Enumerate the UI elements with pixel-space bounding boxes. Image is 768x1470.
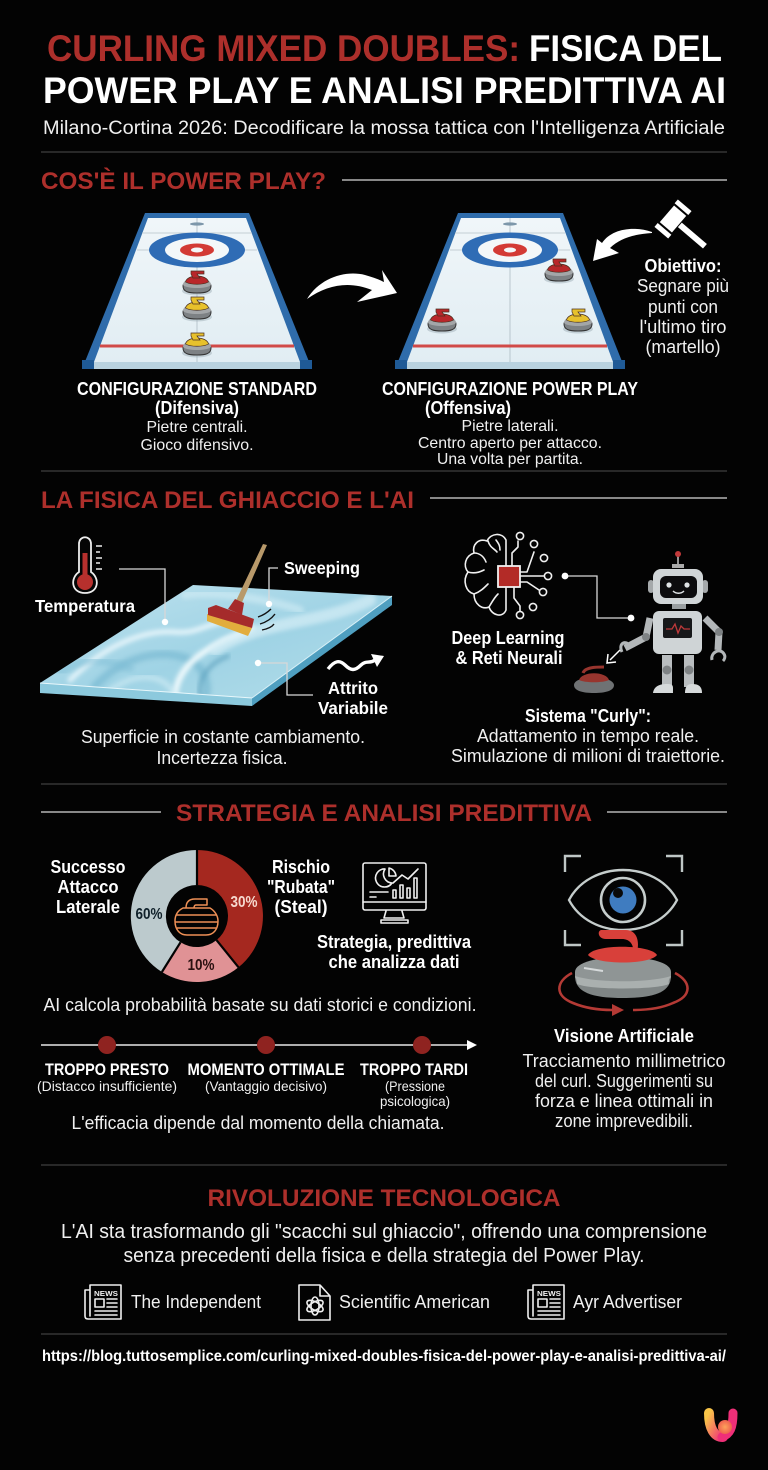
text: standard configuration xyxy=(77,379,317,454)
source: the independent: NEWS xyxy=(94,1289,118,1298)
label: deep learning: & Reti Neurali xyxy=(456,648,562,668)
label: rischio rubata: "Rubata" xyxy=(267,877,335,897)
text: visione artificiale: Tracciamento millimetrico xyxy=(522,1051,726,1071)
text: standard configuration: Gioco difensivo. xyxy=(140,437,254,454)
text: sistema curly xyxy=(451,706,725,766)
callout: obiettivo: Obiettivo: xyxy=(644,256,722,276)
panel: strategia e analisi predittiva xyxy=(37,800,727,1133)
text: AI probabilities: AI calcola probabilità basate su dati storici e condizioni. xyxy=(44,995,476,1015)
label: deep learning: Deep Learning xyxy=(452,628,564,648)
label: deep learning xyxy=(452,628,564,668)
text: sistema curly: Sistema "Curly": xyxy=(525,706,651,726)
source: ayr advertiser: Ayr Advertiser xyxy=(573,1291,682,1312)
text: conclusion xyxy=(61,1220,707,1267)
callout: obiettivo: l'ultimo tiro xyxy=(640,317,726,337)
text: power play configuration: Pietre laterali. xyxy=(462,418,558,435)
text: surface description: Superficie in costante cambiamento. xyxy=(81,727,365,747)
text: visione artificiale: zone imprevedibili. xyxy=(555,1111,693,1131)
label: successo attacco laterale: Successo xyxy=(50,857,126,877)
label: troppo tardi: TROPPO TARDI xyxy=(360,1061,468,1079)
title: POWER PLAY E ANALISI PREDITTIVA AI xyxy=(43,70,726,111)
icon: curling stone outline xyxy=(175,899,218,935)
icon: gavel xyxy=(654,199,717,260)
panel: cos'è il power play xyxy=(41,167,729,468)
label: momento ottimale xyxy=(188,1061,344,1094)
label: temperatura: Temperatura xyxy=(35,596,135,616)
text: conclusion: senza precedenti della fisica e della strategia del Power Play. xyxy=(124,1244,644,1267)
callout: obiettivo: Segnare più xyxy=(637,276,729,296)
text: power play configuration: (Offensiva) xyxy=(425,398,511,418)
text: visione artificiale: del curl. Suggerimenti su xyxy=(535,1071,713,1091)
label: troppo presto xyxy=(37,1061,177,1094)
text: surface description: Incertezza fisica. xyxy=(156,748,288,768)
value: 30%: 30% xyxy=(230,894,258,911)
value: 60%: 60% xyxy=(136,906,162,923)
text: power play configuration: Centro aperto per attacco. xyxy=(418,435,602,452)
label: rischio rubata: (Steal) xyxy=(274,897,328,917)
text: strategia predittiva: che analizza dati xyxy=(328,952,460,972)
icon: hand to stone arrow xyxy=(607,650,620,663)
value: 10%: 10% xyxy=(188,957,214,974)
source: ayr advertiser xyxy=(528,1285,682,1319)
text: power play configuration: Una volta per partita. xyxy=(437,451,583,468)
title: FISICA DEL xyxy=(529,28,722,69)
text: power play configuration: CONFIGURAZIONE POWER PLAY xyxy=(382,379,638,399)
panel: la fisica del ghiaccio e l'AI xyxy=(35,487,727,768)
source: scientific american: Scientific American xyxy=(339,1291,490,1312)
text: standard configuration: Pietre centrali. xyxy=(146,419,248,436)
callout: obiettivo xyxy=(637,256,729,357)
label: troppo presto: (Distacco insufficiente) xyxy=(37,1078,177,1094)
label: successo attacco laterale xyxy=(50,857,126,917)
subtitle: Milano-Cortina 2026: Decodificare la mossa tattica con l'Intelligenza Artificiale xyxy=(43,118,725,139)
text: standard configuration: CONFIGURAZIONE STANDARD xyxy=(77,379,317,399)
text: sistema curly: Adattamento in tempo reale. xyxy=(477,726,699,746)
heading: rivoluzione tecnologica: RIVOLUZIONE TECNOLOGICA xyxy=(208,1185,560,1212)
label: rischio rubata: Rischio xyxy=(272,857,330,877)
source: ayr advertiser: NEWS xyxy=(537,1289,561,1298)
label: troppo tardi: psicologica) xyxy=(380,1093,450,1109)
text: strategia predittiva: Strategia, predittiva xyxy=(317,932,472,952)
icon: wavy arrow xyxy=(328,654,384,670)
icon: robot xyxy=(621,551,725,693)
callout: obiettivo: punti con xyxy=(648,297,718,317)
text: efficacia: L'efficacia dipende dal momento della chiamata. xyxy=(72,1113,444,1133)
label: troppo tardi xyxy=(360,1061,468,1109)
source: scientific american xyxy=(299,1285,490,1320)
label: troppo tardi: (Pressione xyxy=(385,1078,445,1094)
icon: brain with chip xyxy=(465,532,552,619)
source url: https://blog.tuttosemplice.com/curling-mixed-doubles-fisica-del-power-play-e-analisi-predittiva-ai/ xyxy=(42,1348,727,1365)
source: the independent: The Independent xyxy=(131,1291,261,1312)
text: standard configuration: (Difensiva) xyxy=(155,398,239,418)
icon: broom xyxy=(207,544,275,636)
icon: analytics monitor xyxy=(363,863,426,923)
icon: computer vision eye and stone xyxy=(559,856,688,1016)
text: strategia predittiva xyxy=(317,932,472,972)
text: visione artificiale: forza e linea ottimali in xyxy=(535,1091,713,1111)
label: rischio rubata xyxy=(267,857,335,917)
arrow: hammer to court xyxy=(593,229,652,261)
label: successo attacco laterale: Attacco xyxy=(58,877,119,897)
text: surface description xyxy=(81,727,365,768)
label: attrito variabile: Attrito xyxy=(328,678,378,698)
icon: robot's curling stone xyxy=(574,667,614,693)
icon: thermometer xyxy=(73,537,102,593)
text: visione artificiale: Visione Artificiale xyxy=(554,1026,694,1046)
label: attrito variabile xyxy=(318,678,388,718)
text: visione artificiale xyxy=(522,1026,726,1131)
logo xyxy=(709,1413,733,1437)
source: the independent xyxy=(85,1285,261,1319)
panel: rivoluzione tecnologica xyxy=(61,1185,707,1320)
title: CURLING MIXED DOUBLES: xyxy=(47,28,520,69)
text: power play configuration xyxy=(382,379,638,468)
text: conclusion: L'AI sta trasformando gli "scacchi sul ghiaccio", offrendo una comprensione xyxy=(61,1220,707,1243)
chart: probability donut xyxy=(131,850,263,982)
label: sweeping: Sweeping xyxy=(284,558,360,578)
heading: strategia: STRATEGIA E ANALISI PREDITTIVA xyxy=(176,800,592,827)
heading: cos'è il power play: COS'È IL POWER PLAY? xyxy=(41,167,326,195)
label: troppo presto: TROPPO PRESTO xyxy=(45,1061,169,1079)
label: successo attacco laterale: Laterale xyxy=(56,897,120,917)
chart: timing timeline xyxy=(37,1036,477,1109)
label: momento ottimale: MOMENTO OTTIMALE xyxy=(188,1061,344,1079)
illustration: ice slab xyxy=(40,585,392,706)
court: standard configuration xyxy=(82,213,312,369)
label: momento ottimale: (Vantaggio decisivo) xyxy=(205,1078,327,1094)
arrow: standard to power play xyxy=(307,270,397,302)
title xyxy=(43,28,726,111)
heading: fisica del ghiaccio: LA FISICA DEL GHIACCIO E L'AI xyxy=(41,487,414,514)
court: power play configuration xyxy=(395,213,625,369)
label: attrito variabile: Variabile xyxy=(318,698,388,718)
text: sistema curly: Simulazione di milioni di traiettorie. xyxy=(451,746,725,766)
callout: obiettivo: (martello) xyxy=(646,337,720,357)
